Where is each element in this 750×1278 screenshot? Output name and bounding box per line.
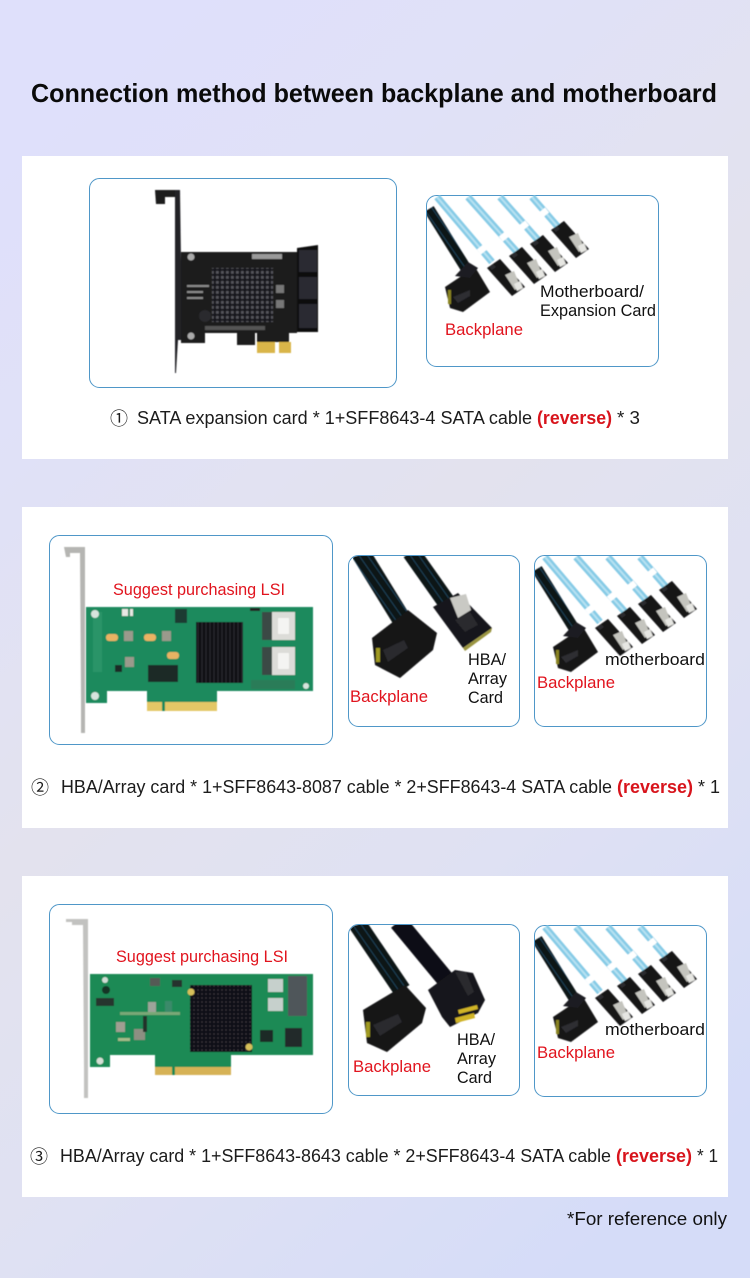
label: HBA/Array Card: HBA/ (468, 651, 506, 669)
label: Backplane: Backplane (537, 1044, 615, 1062)
cable photo (356, 922, 485, 1052)
label: HBA/Array Card: Card (468, 689, 503, 707)
label: Motherboard/Expansion Card: Expansion Card (540, 302, 656, 320)
label: HBA/Array Card: Card (457, 1069, 492, 1087)
caption: * 1 (698, 777, 720, 797)
label: Suggest purchasing LSI: Suggest purchasing LSI (116, 948, 288, 966)
label: motherboard: motherboard (605, 1021, 705, 1039)
caption: HBA/Array card * 1+SFF8643-8643 cable * 2+SFF8643-4 SATA cable (60, 1146, 611, 1166)
caption (30, 1143, 718, 1169)
image frame: LSI card (50, 536, 332, 744)
image frame: SATA cable (534, 926, 706, 1096)
caption: (reverse) (616, 1146, 692, 1166)
cable photo (537, 557, 697, 672)
caption (110, 405, 640, 431)
label: Backplane: Backplane (350, 688, 428, 706)
label: Backplane: Backplane (537, 674, 615, 692)
label: HBA/Array Card (468, 651, 508, 707)
caption: (reverse) (617, 777, 693, 797)
label: Backplane: Backplane (353, 1058, 431, 1076)
image frame: SATA expansion card (90, 178, 396, 388)
label: Motherboard/Expansion Card: Motherboard/ (540, 283, 644, 301)
image frame: SATA cable (534, 556, 706, 726)
label: HBA/Array Card: Array (468, 670, 508, 688)
caption: ① (110, 405, 128, 431)
caption: * 1 (697, 1146, 718, 1166)
image frame: LSI card (50, 904, 332, 1114)
cable photo (429, 197, 589, 312)
image frame: SFF8643-8643 cable (348, 922, 520, 1096)
label: Backplane: Backplane (445, 321, 523, 339)
label: HBA/Array Card (457, 1031, 497, 1087)
label: HBA/Array Card: Array (457, 1050, 497, 1068)
caption: ③ (30, 1143, 48, 1169)
panel: HBA card with SFF8643-8087 cable option (22, 507, 728, 828)
panel: HBA card with SFF8643-8643 cable option (22, 876, 728, 1197)
footnote: *For reference only (567, 1209, 727, 1229)
caption: * 3 (617, 408, 640, 428)
image frame: SATA cable (426, 196, 658, 366)
caption: SATA expansion card * 1+SFF8643-4 SATA cable (137, 408, 532, 428)
caption: HBA/Array card * 1+SFF8643-8087 cable * 2+SFF8643-4 SATA cable (61, 777, 612, 797)
label: HBA/Array Card: HBA/ (457, 1031, 495, 1049)
cable photo (537, 927, 697, 1042)
panel: SATA expansion card option (22, 156, 728, 459)
cable photo (360, 552, 492, 678)
caption: (reverse) (537, 408, 612, 428)
label: Suggest purchasing LSI: Suggest purchasing LSI (113, 581, 285, 599)
caption (31, 774, 720, 800)
label: motherboard: motherboard (605, 651, 705, 669)
image frame: SFF8643-8087 cable (348, 552, 520, 726)
title: Connection method between backplane and motherboard (31, 78, 717, 108)
label: Motherboard/Expansion Card (540, 283, 656, 320)
caption: ② (31, 774, 49, 800)
